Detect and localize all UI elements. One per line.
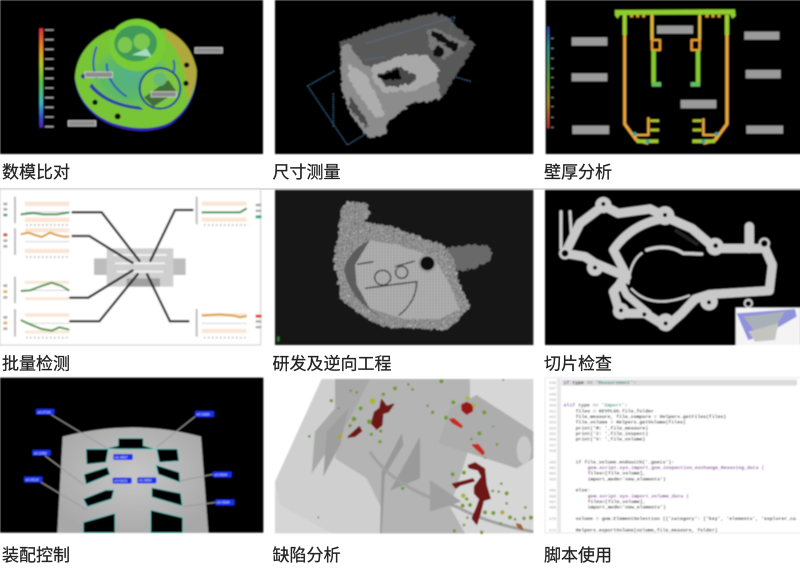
current line highlight — [562, 380, 797, 386]
cavities — [83, 438, 183, 533]
panel: model comparison — [0, 0, 263, 154]
casting body — [340, 13, 475, 138]
line numbers: 448 — [549, 393, 557, 397]
code listing: files=[file_volume], — [588, 471, 646, 477]
code listing: gom.script.sys.import_gom_inspection_exchange_Resaving_data ( — [588, 465, 765, 471]
code listing: elif type == 'Import': — [564, 403, 627, 409]
line numbers: 447 — [549, 388, 557, 392]
code listing: import_mode='new_elements') — [588, 476, 666, 482]
code listing: import_mode='new_elements') — [588, 505, 666, 511]
translucent part volumes — [275, 379, 533, 533]
line numbers: 463 — [549, 478, 557, 482]
line numbers: 452 — [549, 416, 557, 420]
line numbers: 465 — [549, 490, 557, 494]
line numbers: 466 — [549, 495, 557, 499]
measurement values: ±0.0510 — [25, 478, 39, 482]
slot detail — [357, 261, 417, 316]
measurement values: ±0.4567 — [115, 455, 128, 459]
measurement values: ±0.0623 — [114, 479, 127, 483]
cooling channel dark stripe — [675, 230, 698, 245]
code listing: file_measure, file_compare = Helpers.getFiles(files) — [576, 414, 726, 420]
heading: batch inspection: 批量检测 — [2, 354, 70, 374]
measurement values: ±0.0534 — [214, 473, 227, 477]
heading: defect analysis: 缺陷分析 — [272, 546, 340, 565]
line numbers: 450 — [549, 405, 557, 409]
small pores green — [308, 379, 533, 534]
rim speckle — [333, 201, 470, 330]
heading: dimension measurement: 尺寸测量 — [272, 163, 340, 182]
line numbers: 470 — [549, 518, 557, 522]
code listing: if type == 'Measurement': — [564, 380, 636, 386]
callout labels — [68, 48, 222, 126]
chart top left 1 — [3, 197, 70, 225]
line numbers: 456 — [549, 439, 557, 443]
code listing: print('M: ',file_measure) — [576, 425, 648, 431]
callout labels — [572, 26, 783, 134]
central part image — [94, 248, 186, 287]
line numbers: 451 — [549, 410, 557, 414]
dark crescent — [344, 240, 382, 318]
line numbers: 472 — [549, 529, 557, 533]
panel: slice inspection — [545, 190, 800, 345]
heading: script usage: 脚本使用 — [544, 545, 612, 565]
heading: slice inspection: 切片检查 — [544, 354, 612, 374]
line numbers: 453 — [549, 422, 557, 426]
code listing: Helpers.exportVolume(volume,file_measure, folder) — [576, 527, 718, 533]
panel: wall thickness analysis — [546, 0, 800, 154]
chart right top — [197, 197, 261, 225]
3D inset — [736, 308, 800, 345]
dimension lines — [308, 17, 472, 145]
line gutter — [557, 378, 561, 532]
code listing: gom.script.sys.import_volume_data ( — [588, 493, 689, 499]
code listing: if file_volume.endswith('.gomis'): — [576, 459, 674, 465]
connector lines — [69, 210, 193, 321]
panel: script usage — [545, 378, 800, 533]
corner mark — [277, 337, 279, 341]
rough point cloud — [333, 201, 491, 330]
line numbers: 457 — [549, 444, 557, 448]
code listing: else: — [576, 488, 590, 494]
line numbers: 461 — [549, 467, 557, 471]
panel: assembly control — [0, 378, 263, 533]
heading: assembly control: 装配控制 — [2, 546, 70, 565]
measurement tags — [24, 409, 234, 505]
panel: R&D and reverse engineering — [275, 190, 533, 345]
line numbers — [549, 382, 557, 533]
line numbers: 454 — [549, 427, 557, 431]
line numbers: 458 — [549, 450, 557, 454]
code listing: file_volume = Helpers.getVolume(files) — [576, 420, 686, 426]
panel: dimension measurement — [275, 0, 533, 154]
color scale bar — [39, 28, 54, 128]
measurement values — [25, 410, 230, 505]
measurement values: ±0.0730 — [37, 410, 51, 414]
measurement values: ±0.1950 — [34, 451, 47, 455]
porosity clusters red — [348, 400, 523, 529]
bore hole — [419, 255, 435, 271]
code listing — [564, 380, 796, 533]
panel: batch inspection — [0, 189, 261, 345]
leader lines — [40, 414, 216, 510]
line numbers: 468 — [549, 507, 557, 511]
code listing: print('I: ',file_inspect) — [576, 431, 648, 437]
line numbers: 467 — [549, 501, 557, 505]
thickness scale bar — [547, 27, 554, 128]
line numbers: 449 — [549, 399, 557, 403]
inner surface speckle — [355, 240, 459, 319]
panel: defect analysis — [275, 379, 533, 534]
scanned part flange — [75, 19, 197, 131]
code listing: files=[file_volume], — [588, 499, 646, 505]
slice outline — [559, 197, 772, 331]
divider row one — [0, 188, 800, 190]
line numbers: 446 — [549, 382, 557, 386]
measurement values: ±0.1660 — [196, 413, 210, 417]
code listing: volume = gom.ElementSelection ({'category': ['key', 'elements', 'explorer_ca — [576, 516, 796, 522]
code listing: files = KEYPLUS.file_folder — [576, 408, 654, 414]
chart left 3 — [3, 277, 69, 303]
heading: model comparison: 数模比对 — [2, 163, 70, 182]
line numbers: 460 — [549, 461, 557, 465]
measurement values: ±0.0850 — [139, 479, 152, 483]
cylinder nub — [443, 245, 491, 271]
outer rim — [333, 201, 470, 330]
inner surface — [355, 240, 459, 319]
cross-section profile — [615, 9, 736, 144]
measurement values: ±0.0540 — [217, 501, 230, 505]
code listing: print('V: ',file_volume) — [576, 437, 645, 443]
white corner — [275, 379, 322, 482]
heading: R&D and reverse engineering: 研发及逆向工程 — [272, 354, 392, 374]
chart right bottom — [197, 309, 261, 338]
bolt holes — [562, 202, 768, 325]
line numbers: 462 — [549, 473, 557, 477]
heading: wall thickness analysis: 壁厚分析 — [544, 163, 612, 182]
line numbers: 455 — [549, 433, 557, 437]
CT slice body — [57, 427, 208, 533]
chart left 2 — [3, 228, 70, 257]
chart left 4 — [3, 309, 70, 338]
